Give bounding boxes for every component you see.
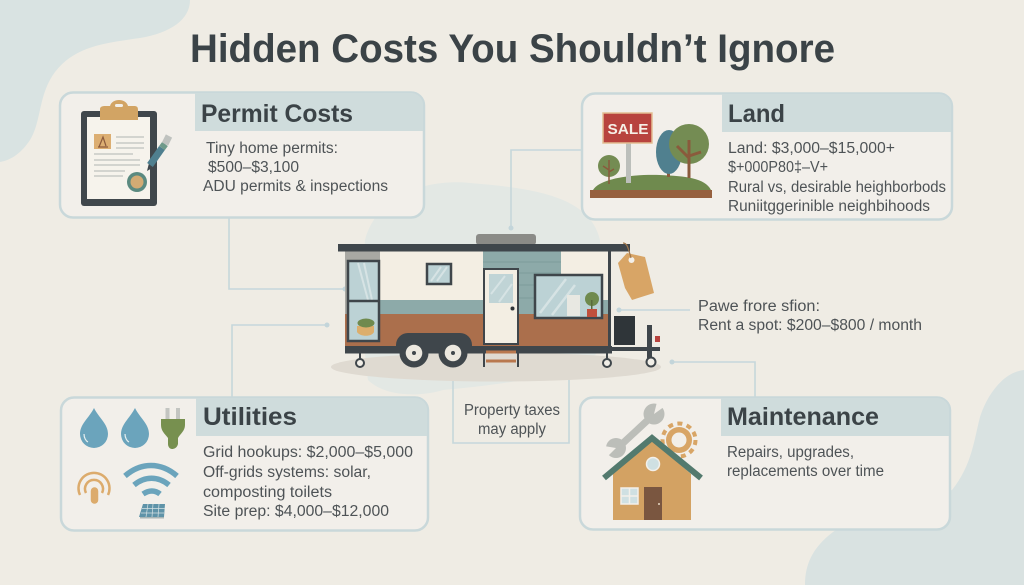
icon: price tag — [618, 243, 654, 300]
title: Hidden Costs You Shouldn’t Ignore — [190, 27, 835, 71]
icon: plug — [161, 408, 185, 449]
heading: land: Land — [728, 100, 785, 128]
heading: permit costs: Permit Costs — [201, 100, 353, 128]
text: rent a spot: Rent a spot: $200–$800 / month — [698, 317, 922, 334]
text: maintenance details: Repairs, upgrades, — [727, 444, 854, 461]
heading: utilities: Utilities — [203, 403, 297, 431]
tiny home on trailer — [331, 234, 661, 382]
text: utilities details: Site prep: $4,000–$12,000 — [203, 503, 389, 520]
text: rent a spot: Pawe frore sfion: — [698, 298, 820, 315]
text: land details: Land: $3,000–$15,000+ — [728, 140, 895, 157]
icon: clipboard — [81, 100, 169, 206]
panel: utilities — [61, 398, 428, 530]
text: utilities details — [203, 444, 413, 520]
panel: maintenance — [580, 398, 950, 530]
text: land details: Runiitggerinible neighbihoods — [728, 198, 930, 215]
panel: land — [582, 94, 952, 220]
icon: land for sale — [590, 113, 712, 198]
icon: water drop 2 — [121, 408, 149, 448]
text: maintenance details — [727, 444, 884, 480]
icon: wifi — [125, 466, 177, 494]
icon: land for sale: SALE — [608, 121, 648, 138]
icon: water drop 1 — [80, 408, 108, 448]
text: property taxes — [464, 402, 560, 438]
connector lines — [229, 150, 755, 443]
text: rent a spot — [698, 298, 922, 334]
text: property taxes: Property taxes — [464, 402, 560, 419]
text: utilities details: Grid hookups: $2,000–$5,000 — [203, 444, 413, 461]
icon: signal — [78, 473, 109, 500]
text: permit details: Tiny home permits: — [206, 140, 338, 157]
text: land details: Rural vs, desirable heighborbods — [728, 179, 946, 196]
text: permit details: $500–$3,100 — [208, 159, 299, 176]
panel: permit costs — [60, 92, 424, 218]
icon: house with tools — [604, 402, 701, 520]
text: permit details: ADU permits & inspections — [203, 178, 388, 195]
text: land details: $+000P80‡–V+ — [728, 159, 828, 176]
text: permit details — [203, 140, 388, 195]
icon: solar panel — [139, 504, 165, 518]
text: utilities details: Off-grids systems: solar, — [203, 464, 371, 481]
heading: maintenance: Maintenance — [727, 403, 879, 431]
text: land details — [728, 140, 946, 215]
text: property taxes: may apply — [478, 421, 546, 438]
text: utilities details: composting toilets — [203, 484, 332, 501]
text: maintenance details: replacements over time — [727, 463, 884, 480]
